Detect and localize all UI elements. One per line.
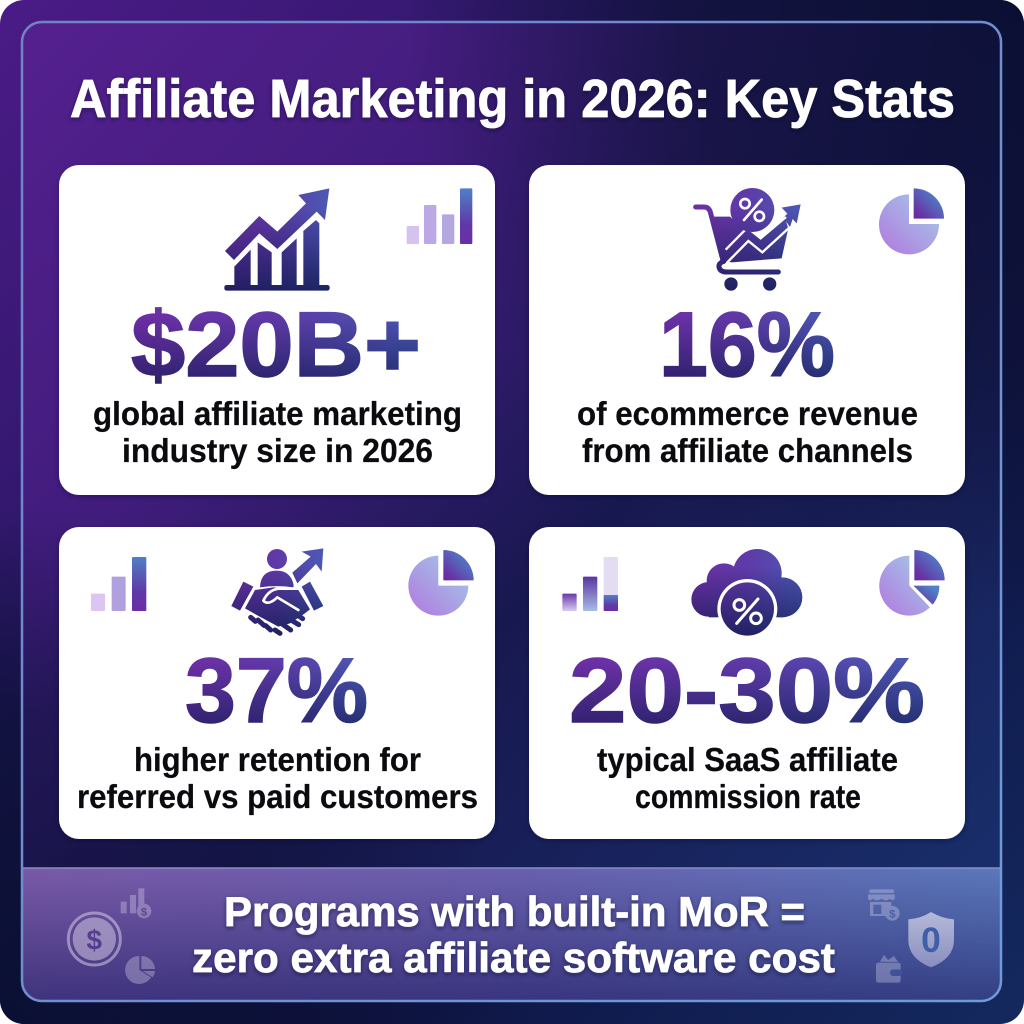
- stat description: [577, 395, 918, 469]
- stat description: [77, 741, 478, 815]
- icon: small pie chart: [408, 550, 474, 616]
- icon: bars with dollar: [121, 888, 151, 918]
- title: Affiliate Marketing in 2026: Key Stats: [70, 69, 955, 129]
- stat value: 20-30%: [569, 640, 925, 742]
- stat description: of ecommerce revenue: [577, 395, 918, 432]
- icon: pie chart: [125, 956, 155, 984]
- stat value: $20B+: [131, 294, 421, 396]
- icon: dollar coin: [68, 913, 120, 965]
- icon: small bar chart: [91, 557, 146, 611]
- stat description: higher retention for: [134, 741, 421, 778]
- stat description: [93, 395, 462, 469]
- stat description: typical SaaS affiliate: [597, 741, 898, 778]
- stat description: [597, 741, 898, 815]
- icon: storefront with dollar: $: [889, 909, 896, 921]
- icon: handshake with person and arrow: [231, 548, 323, 633]
- icon: storefront with dollar: [868, 889, 900, 921]
- stat value: 16%: [659, 294, 835, 396]
- stat description: commission rate: [635, 778, 861, 815]
- footer message: [192, 888, 835, 981]
- icon: small bar chart: [562, 557, 618, 611]
- panel: SaaS commission: [529, 527, 965, 839]
- icon: shield with zero: [908, 912, 954, 967]
- panel: customer retention: [59, 527, 495, 839]
- stat description: industry size in 2026: [122, 432, 433, 469]
- footer message: Programs with built-in MoR =: [224, 888, 805, 935]
- icon: shopping cart with percent and arrow: [696, 188, 801, 291]
- stat description: referred vs paid customers: [77, 778, 478, 815]
- footer message: zero extra affiliate software cost: [192, 934, 835, 981]
- stat description: from affiliate channels: [582, 432, 913, 469]
- stat value: 37%: [185, 640, 368, 742]
- icon: wallet: [876, 955, 902, 983]
- stat description: global affiliate marketing: [93, 395, 462, 432]
- icon: dollar coin: $: [87, 924, 103, 955]
- icon: small pie chart: [879, 188, 944, 254]
- icon: bars with dollar: $: [141, 906, 148, 918]
- icon: shield with zero: 0: [921, 921, 941, 960]
- icon: small bar chart: [407, 188, 472, 244]
- icon: cloud with percent: [691, 549, 802, 639]
- panel: industry size: [59, 165, 495, 495]
- panel: ecommerce revenue: [529, 165, 965, 495]
- icon: rising bar chart with arrow: [224, 188, 330, 291]
- icon: small pie chart: [879, 550, 945, 616]
